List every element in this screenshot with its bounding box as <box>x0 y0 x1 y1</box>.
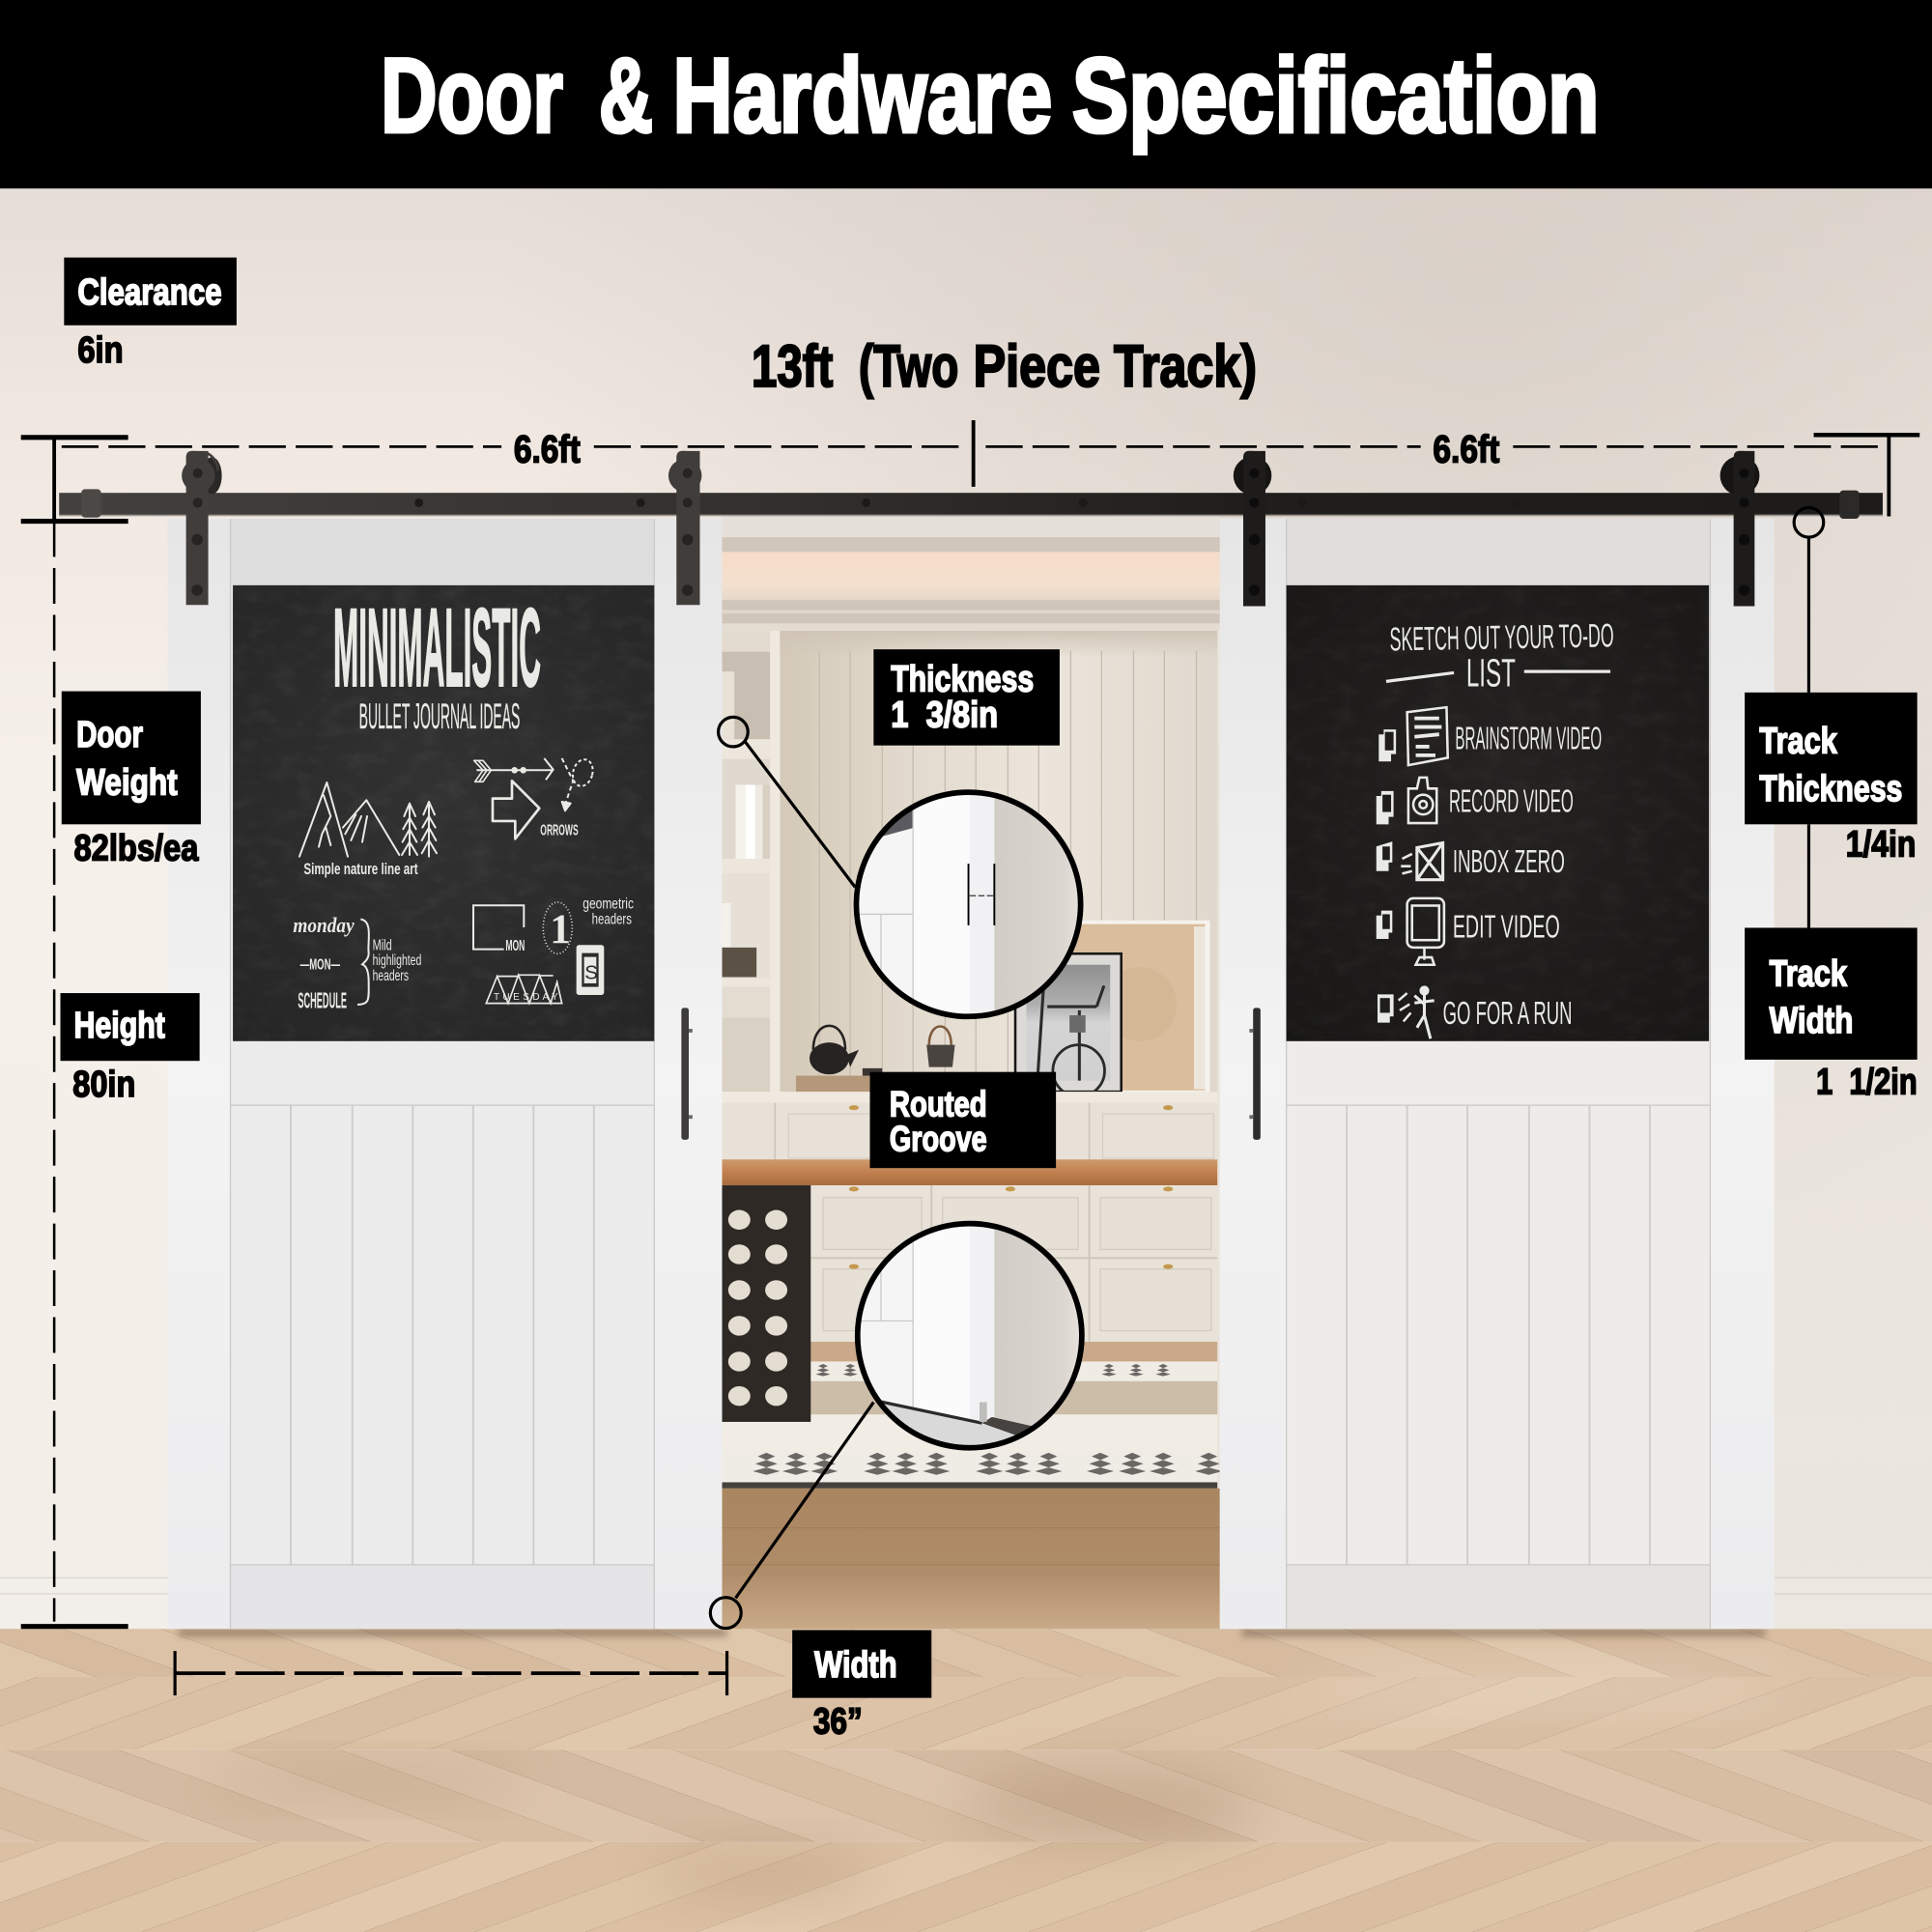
panel: left chalkboard: BULLET JOURNAL IDEAS <box>359 696 520 736</box>
title: Specification <box>1072 37 1600 155</box>
chalk drawing: geometric headers: headers <box>592 912 632 928</box>
handle <box>1249 1008 1261 1140</box>
title: Hardware <box>672 37 1052 155</box>
to-do icons <box>1399 707 1448 1038</box>
panel: left chalkboard <box>233 585 654 1041</box>
hanger 3 <box>1234 451 1271 607</box>
interior room seen through the doorway <box>722 515 1222 1629</box>
chalk caption: mon: —MON— <box>300 956 340 973</box>
track length heading <box>752 333 1257 399</box>
text: MINIMALISTIC <box>333 586 541 710</box>
chalk caption: monday: monday <box>293 913 355 937</box>
chalk caption: highlighted headers <box>373 937 421 984</box>
door weight label: Door <box>76 714 143 755</box>
chalk heading: to-do list <box>1389 617 1614 695</box>
thickness callout leader <box>719 717 855 887</box>
thickness label: 1 3/8in <box>891 695 998 736</box>
perforated black desk panel <box>722 1185 810 1422</box>
door weight value: 82lbs/ea <box>74 827 199 868</box>
width label: Width <box>814 1644 897 1686</box>
width value: 36” <box>813 1701 863 1743</box>
hanger 1 <box>182 451 222 605</box>
left section length: 6.6ft <box>514 428 581 470</box>
panel: right chalkboard: BRAINSTORM VIDEO <box>1455 722 1602 757</box>
track width label: Width <box>1770 1000 1853 1041</box>
door weight label: Weight <box>76 762 178 804</box>
thickness label <box>873 649 1060 746</box>
bookshelf <box>722 631 780 1094</box>
to-do checkboxes <box>1377 729 1396 1023</box>
floor and rug inside the room <box>722 1342 1222 1629</box>
framed bicycle photograph <box>1014 952 1122 1096</box>
width label <box>792 1631 931 1743</box>
panelled back wall <box>779 631 1217 1094</box>
track width label <box>1745 927 1918 1103</box>
height value: 80in <box>72 1064 135 1105</box>
chalk drawing: geometric headers: 1 <box>550 906 571 952</box>
chalk heading: to-do list: LIST <box>1466 650 1516 695</box>
hanger 2 <box>668 451 701 605</box>
right barn door <box>1220 519 1775 1629</box>
chalk heading rules <box>1386 671 1610 681</box>
chalk caption: arrows: ORROWS <box>540 822 579 838</box>
chalk caption: line art: Simple nature line art <box>303 860 418 878</box>
header bar <box>0 0 1932 188</box>
leaning art canvas <box>1054 921 1210 1093</box>
track length heading: Piece <box>974 333 1100 399</box>
track callout leader <box>1794 508 1824 927</box>
magnifier: door thickness detail <box>850 788 1096 1023</box>
track thickness label: Track <box>1759 720 1837 761</box>
chalk caption: highlighted headers: Mild <box>373 937 392 953</box>
chalk drawing: geometric headers: T U E S D A Y <box>494 992 558 1003</box>
routed groove label <box>870 1072 1056 1168</box>
track thickness value: 1/4in <box>1846 823 1916 865</box>
track length heading: (Two <box>859 333 958 399</box>
chalk drawing: geometric headers: MON <box>505 938 525 954</box>
barn door track rail <box>59 489 1883 519</box>
upper cabinets <box>722 1092 1217 1161</box>
to-do list labels: EDIT VIDEO <box>1453 910 1560 946</box>
title: Door <box>381 37 563 155</box>
chalk drawing: geometric headers: S <box>584 961 598 983</box>
title: & <box>599 37 653 155</box>
panel: left chalkboard: SCHEDULE <box>298 987 347 1012</box>
to-do list labels: RECORD VIDEO <box>1449 784 1574 820</box>
right section length: 6.6ft <box>1433 428 1499 470</box>
chalk drawing: geometric headers: geometric <box>582 896 634 913</box>
to-do list labels <box>1443 722 1602 1032</box>
hanger 4 <box>1720 451 1759 607</box>
height label: Height <box>74 1005 165 1046</box>
to-do list labels: INBOX ZERO <box>1453 844 1565 880</box>
chalk drawing: mountains and trees <box>299 782 437 857</box>
height dimension line <box>21 522 128 1627</box>
lower cabinets <box>810 1185 1217 1342</box>
width callout leader <box>710 1403 873 1629</box>
to-do list labels: GO FOR A RUN <box>1443 996 1573 1032</box>
routed groove label: Groove <box>890 1119 987 1158</box>
door weight label <box>62 692 201 868</box>
track end stop left <box>81 489 101 518</box>
panel: right chalkboard <box>1287 585 1709 1041</box>
chalk heading: to-do list: SKETCH OUT YOUR TO-DO <box>1389 617 1614 658</box>
clearance label: Clearance <box>77 271 222 313</box>
track thickness label <box>1745 693 1918 865</box>
chalk drawing: geometric headers <box>473 896 634 1004</box>
clearance value: 6in <box>77 329 124 371</box>
herringbone wood floor <box>0 1629 1932 1932</box>
clearance label <box>64 258 237 371</box>
left barn door <box>167 519 722 1629</box>
chalk drawing: arrows <box>474 757 596 838</box>
teapots and tray <box>796 1026 955 1093</box>
thickness label: Thickness <box>891 659 1034 700</box>
track end stop right <box>1839 491 1860 519</box>
title <box>381 37 1600 155</box>
routed groove label: Routed <box>890 1085 987 1124</box>
height label <box>60 993 200 1105</box>
magnifier: routed groove detail <box>854 1221 1085 1451</box>
chalk brace <box>357 920 369 1005</box>
width dimension line <box>175 1651 727 1695</box>
track width label: Track <box>1770 952 1848 994</box>
wall background <box>0 188 1932 1630</box>
handle <box>681 1008 693 1140</box>
chalk caption: highlighted headers: highlighted <box>373 952 421 969</box>
track dimension lines <box>21 420 1919 522</box>
chalk caption: highlighted headers: headers <box>373 968 409 984</box>
track length heading: Track) <box>1114 333 1257 399</box>
track length heading: 13ft <box>752 333 833 399</box>
wood countertop <box>722 1159 1217 1185</box>
